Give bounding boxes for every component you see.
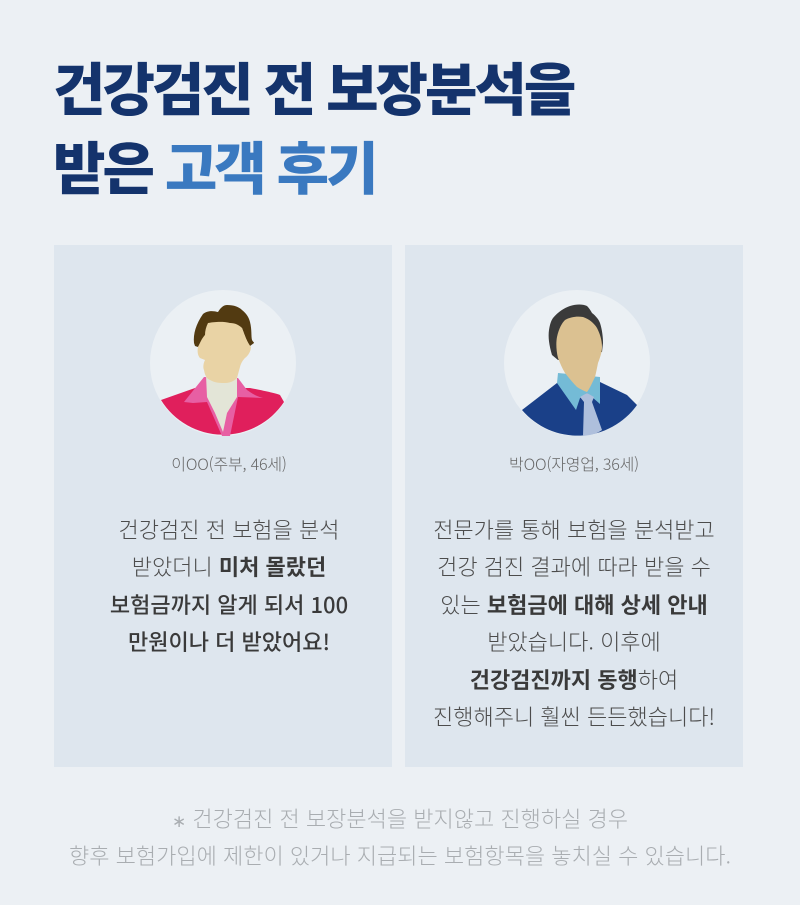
name label: 이OO(주부, 46세): [171, 451, 287, 475]
footnote: ∗ 건강검진 전 보장분석을 받지않고 진행하실 경우: [172, 802, 628, 834]
review text: 건강검진까지 동행하여: [470, 663, 678, 695]
review text: 있는 보험금에 대해 상세 안내: [440, 588, 708, 620]
avatar: man in blue suit: [504, 290, 650, 436]
review text: 만원이나 더 받았어요!: [128, 625, 330, 657]
footnote: 향후 보험가입에 제한이 있거나 지급되는 보험항목을 놓치실 수 있습니다.: [69, 839, 731, 871]
review text: 건강 검진 결과에 따라 받을 수: [437, 550, 711, 582]
title line 2: 받은 고객 후기: [53, 124, 376, 206]
review text: 보험금까지 알게 되서 100: [110, 588, 348, 620]
review text: 전문가를 통해 보험을 분석받고: [433, 513, 715, 545]
panel: review 1: [54, 245, 392, 767]
title: [53, 45, 574, 206]
footnote: [69, 802, 731, 871]
review text: 진행해주니 훨씬 든든했습니다!: [433, 700, 715, 732]
review text: 건강검진 전 보험을 분석: [119, 513, 339, 545]
name label: 박OO(자영업, 36세): [509, 451, 639, 475]
review text: 받았더니 미처 몰랐던: [132, 550, 326, 582]
review text: [110, 513, 348, 657]
review text: [433, 513, 715, 732]
review text: 받았습니다. 이후에: [487, 625, 661, 657]
panel: review 2: [405, 245, 743, 767]
title line 1: 건강검진 전 보장분석을: [53, 45, 573, 127]
avatar: woman in pink jacket: [150, 290, 296, 436]
